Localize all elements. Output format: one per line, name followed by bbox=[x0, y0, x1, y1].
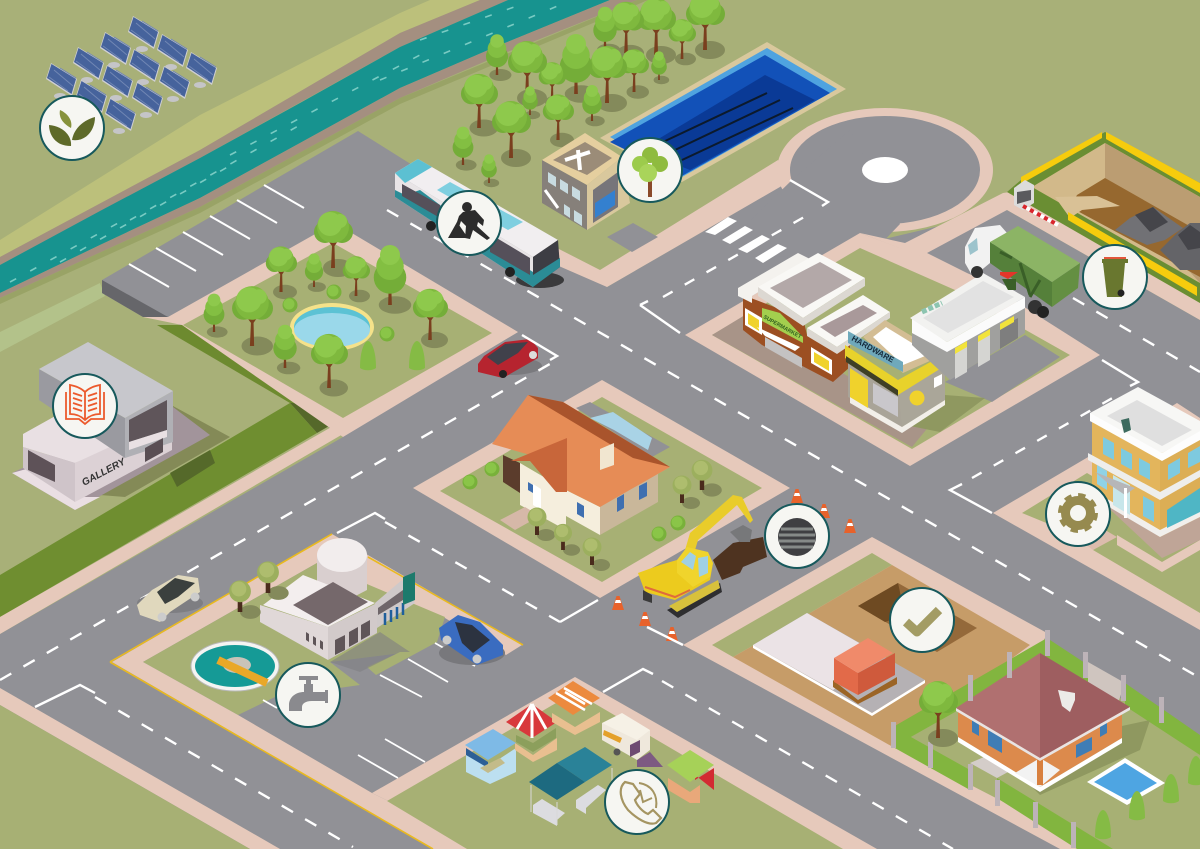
plant building bbox=[260, 572, 415, 672]
gallery slope bands bbox=[0, 325, 343, 617]
yellow office bbox=[1088, 387, 1200, 537]
icon: tap bbox=[276, 663, 340, 727]
orange stall bbox=[548, 681, 600, 735]
depot walkway bbox=[545, 160, 792, 287]
blue car bbox=[439, 615, 505, 665]
gallery sign: GALLERY bbox=[80, 456, 129, 489]
supermarket bbox=[738, 253, 890, 382]
reservoir bbox=[600, 42, 846, 182]
market block bbox=[372, 677, 877, 849]
icon: phone bbox=[605, 770, 669, 834]
hardware sign: HARDWARE bbox=[850, 334, 896, 365]
icon: tree bbox=[618, 138, 682, 202]
supermarket sign: SUPERMARKET bbox=[762, 315, 803, 341]
icon: bin bbox=[1083, 245, 1147, 309]
icon: check bbox=[890, 588, 954, 652]
market stalls bbox=[465, 681, 714, 826]
garage bbox=[910, 273, 1025, 380]
park trees bbox=[204, 211, 448, 397]
crosswalk bbox=[705, 217, 787, 263]
house plot bbox=[891, 630, 1200, 849]
white car bbox=[137, 575, 203, 622]
office block bbox=[993, 403, 1200, 630]
depot building bbox=[542, 133, 658, 252]
blue stall bbox=[465, 729, 516, 784]
red stall bbox=[506, 704, 557, 762]
icon: road worker bbox=[437, 191, 501, 255]
green stall bbox=[667, 750, 714, 803]
road dashes and stop lines bbox=[0, 180, 1200, 849]
house block bbox=[413, 380, 790, 598]
excavator bbox=[638, 495, 767, 618]
quarry bbox=[1007, 132, 1200, 303]
icon: manhole bbox=[765, 504, 829, 568]
river with banks bbox=[0, 0, 648, 352]
parking lot side bbox=[102, 185, 304, 317]
food trailer bbox=[602, 713, 663, 767]
green truck bbox=[965, 225, 1080, 318]
icon: leaves bbox=[40, 96, 104, 160]
park block bbox=[0, 223, 518, 634]
bricks bbox=[833, 638, 897, 704]
brick plot block bbox=[683, 537, 1113, 849]
bus bbox=[395, 159, 564, 288]
red car bbox=[478, 339, 542, 378]
shops block bbox=[685, 192, 1200, 466]
solar panels bbox=[46, 16, 217, 134]
house bbox=[462, 395, 722, 571]
round trees bbox=[229, 561, 289, 619]
gallery building bbox=[12, 342, 230, 510]
icon: gear bbox=[1046, 482, 1110, 546]
settling tank bbox=[191, 641, 279, 691]
cul-de-sac bbox=[720, 108, 993, 262]
water tank bbox=[317, 538, 367, 603]
icon: book bbox=[53, 374, 117, 438]
teal tents bbox=[529, 747, 612, 826]
parked light-blue car bbox=[590, 412, 652, 450]
depot trees bbox=[453, 0, 725, 187]
hardware store bbox=[845, 320, 945, 433]
park pond bbox=[290, 303, 374, 351]
plant block bbox=[110, 534, 523, 849]
lower-left land bbox=[0, 688, 280, 849]
traffic cones bbox=[612, 489, 856, 641]
